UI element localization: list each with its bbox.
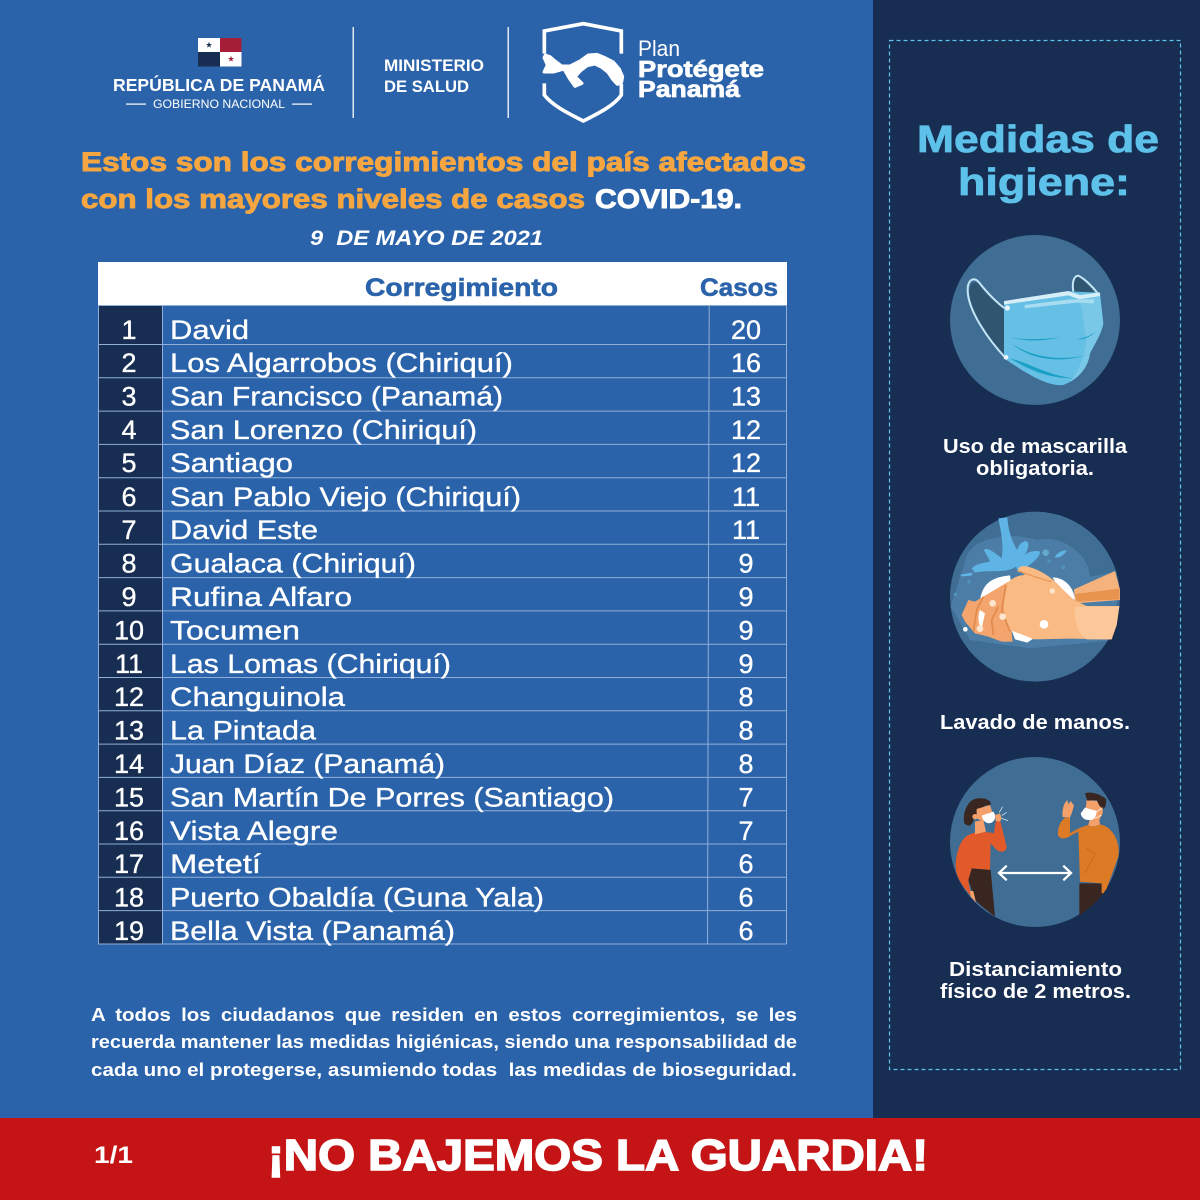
row 17: 6 bbox=[738, 849, 754, 879]
row 1: 20 bbox=[731, 315, 761, 345]
row 3: 13 bbox=[731, 382, 761, 412]
row 6: 6 bbox=[121, 482, 137, 512]
row 5: Santiago bbox=[170, 448, 293, 478]
row 1: 1 bbox=[121, 315, 137, 345]
reminder paragraph: recuerda mantener las medidas higiénicas, siendo una responsabilidad de bbox=[91, 1032, 797, 1052]
reminder paragraph bbox=[91, 1005, 797, 1080]
row 8: 9 bbox=[738, 548, 754, 578]
government name bbox=[113, 74, 325, 111]
title: Estos son los corregimientos del país afectados bbox=[81, 147, 806, 177]
row 11: 9 bbox=[738, 649, 754, 679]
caption: mask: obligatoria. bbox=[976, 458, 1094, 480]
row 16: 16 bbox=[114, 816, 144, 846]
row 17 bbox=[114, 849, 754, 879]
row 3 bbox=[121, 382, 761, 412]
row 3: 3 bbox=[121, 382, 137, 412]
row 10: 10 bbox=[114, 616, 144, 646]
icon: Panama flag bbox=[198, 38, 242, 66]
page number: 1/1 bbox=[94, 1142, 133, 1169]
row 6: 11 bbox=[732, 482, 760, 512]
caption: distancing: Distanciamiento bbox=[949, 959, 1122, 981]
row 18: Puerto Obaldía (Guna Yala) bbox=[170, 882, 544, 912]
table bbox=[98, 262, 787, 946]
row 9: 9 bbox=[738, 582, 754, 612]
table header: Casos bbox=[700, 274, 778, 302]
row 6: San Pablo Viejo (Chiriquí) bbox=[170, 482, 521, 512]
row 18: 6 bbox=[738, 882, 754, 912]
government name: REPÚBLICA DE PANAMÁ bbox=[113, 74, 325, 95]
row 14: Juan Díaz (Panamá) bbox=[170, 749, 445, 779]
row 19 bbox=[114, 916, 754, 946]
row 19: 6 bbox=[738, 916, 754, 946]
row 16 bbox=[114, 816, 754, 846]
row 6 bbox=[121, 482, 760, 512]
row 3: San Francisco (Panamá) bbox=[170, 382, 503, 412]
row 7: 11 bbox=[732, 515, 760, 545]
plan name: Protégete bbox=[638, 56, 764, 82]
row 12: 12 bbox=[114, 682, 144, 712]
plan name: Panamá bbox=[638, 76, 740, 102]
ministry name: MINISTERIO bbox=[384, 56, 484, 75]
row 4 bbox=[121, 415, 761, 445]
row 5: 5 bbox=[121, 448, 137, 478]
row 12: Changuinola bbox=[170, 682, 346, 712]
row 9: 9 bbox=[121, 582, 137, 612]
row 10: 9 bbox=[738, 616, 754, 646]
row 10: Tocumen bbox=[170, 616, 300, 646]
row 15: 15 bbox=[114, 782, 144, 812]
arrow bbox=[999, 866, 1071, 880]
row 16: Vista Alegre bbox=[170, 816, 338, 846]
plan name bbox=[638, 36, 764, 102]
row 18: 18 bbox=[114, 882, 144, 912]
icon: physical distancing bbox=[950, 757, 1120, 927]
row 1 bbox=[121, 315, 761, 345]
caption: mask bbox=[943, 436, 1128, 480]
row 16: 7 bbox=[738, 816, 754, 846]
row 15: San Martín De Porres (Santiago) bbox=[170, 782, 614, 812]
row 15 bbox=[114, 782, 754, 812]
row 5 bbox=[121, 448, 761, 478]
row 9 bbox=[121, 582, 754, 612]
row 19: Bella Vista (Panamá) bbox=[170, 916, 455, 946]
caption: distancing: físico de 2 metros. bbox=[940, 981, 1131, 1003]
caption: hand washing: Lavado de manos. bbox=[940, 712, 1130, 734]
row 12: 8 bbox=[738, 682, 754, 712]
row 12 bbox=[114, 682, 754, 712]
row 9: Rufina Alfaro bbox=[170, 582, 352, 612]
caption: mask: Uso de mascarilla bbox=[943, 436, 1128, 458]
row 1: David bbox=[170, 315, 249, 345]
panel heading bbox=[917, 119, 1159, 204]
caption: distancing bbox=[940, 959, 1131, 1003]
row 11 bbox=[115, 649, 754, 679]
row 7 bbox=[121, 515, 760, 545]
panel: hygiene measures bbox=[873, 0, 1200, 1118]
panel heading: higiene: bbox=[958, 162, 1130, 204]
row 11: 11 bbox=[115, 649, 143, 679]
table header bbox=[98, 262, 787, 305]
row 5: 12 bbox=[731, 448, 761, 478]
reminder paragraph: cada uno el protegerse, asumiendo todas las medidas de bioseguridad. bbox=[91, 1060, 797, 1080]
row 10 bbox=[114, 616, 754, 646]
row 2: Los Algarrobos (Chiriquí) bbox=[170, 348, 513, 378]
title: COVID-19. bbox=[595, 184, 742, 214]
plan name: Plan bbox=[638, 36, 680, 61]
row 19: 19 bbox=[114, 916, 144, 946]
header logos bbox=[113, 24, 764, 121]
row 4: 4 bbox=[121, 415, 137, 445]
row 7: 7 bbox=[121, 515, 137, 545]
slogan: ¡NO BAJEMOS LA GUARDIA! bbox=[268, 1131, 928, 1180]
government name: GOBIERNO NACIONAL bbox=[153, 97, 285, 111]
row 8: Gualaca (Chiriquí) bbox=[170, 548, 416, 578]
row 11: Las Lomas (Chiriquí) bbox=[170, 649, 451, 679]
row 14: 8 bbox=[738, 749, 754, 779]
row 2: 2 bbox=[121, 348, 137, 378]
ministry name: DE SALUD bbox=[384, 77, 469, 96]
row 13 bbox=[114, 716, 754, 746]
row 13: 8 bbox=[738, 716, 754, 746]
row 8: 8 bbox=[121, 548, 137, 578]
row 2: 16 bbox=[731, 348, 761, 378]
row 7: David Este bbox=[170, 515, 318, 545]
icon: shield with map of Panama bbox=[544, 24, 623, 121]
panel heading: Medidas de bbox=[917, 119, 1159, 161]
row 13: La Pintada bbox=[170, 716, 317, 746]
title bbox=[81, 147, 806, 214]
row 4: 12 bbox=[731, 415, 761, 445]
ministry name bbox=[384, 56, 484, 96]
row 8 bbox=[121, 548, 754, 578]
row 2 bbox=[121, 348, 761, 378]
icon: hand washing bbox=[950, 512, 1120, 682]
footer banner bbox=[0, 1118, 1200, 1200]
row 18 bbox=[114, 882, 754, 912]
row 15: 7 bbox=[738, 782, 754, 812]
row 4: San Lorenzo (Chiriquí) bbox=[170, 415, 477, 445]
date: 9 DE MAYO DE 2021 bbox=[310, 227, 543, 250]
row 14: 14 bbox=[114, 749, 144, 779]
reminder paragraph: A todos los ciudadanos que residen en estos corregimientos, se les bbox=[91, 1005, 797, 1025]
row 13: 13 bbox=[114, 716, 144, 746]
row 14 bbox=[114, 749, 754, 779]
icon: surgical mask bbox=[950, 235, 1120, 405]
woman bbox=[956, 798, 1008, 917]
table header: Corregimiento bbox=[365, 274, 558, 302]
man bbox=[1058, 793, 1119, 925]
row 17: 17 bbox=[114, 849, 144, 879]
row 17: Metetí bbox=[170, 849, 262, 879]
title: con los mayores niveles de casos bbox=[81, 184, 585, 214]
